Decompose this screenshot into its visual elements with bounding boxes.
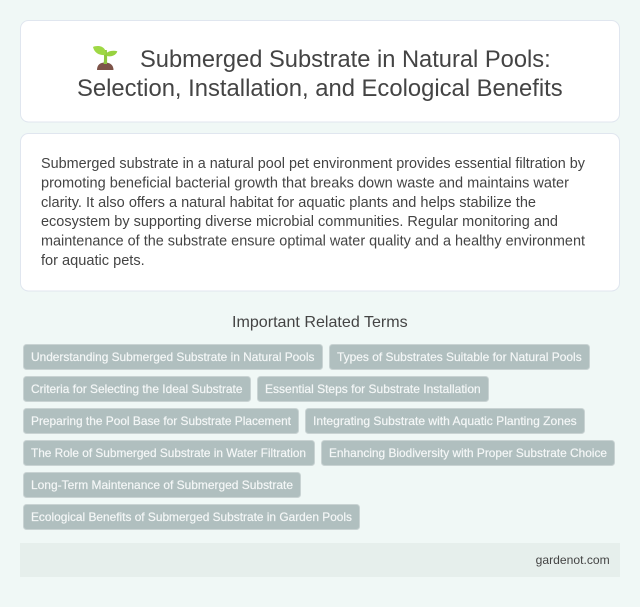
tag: [24, 504, 360, 530]
paragraph text: [41, 156, 586, 269]
paragraph text: maintenance of the substrate ensure optimal water quality and a healthy environment: [41, 234, 585, 250]
tag: Ecological Benefits of Submerged Substrate in Garden Pools: [31, 510, 352, 524]
tag: [258, 376, 488, 402]
tag: Understanding Submerged Substrate in Natural Pools: [31, 350, 314, 364]
paragraph text: clarity. It also offers a natural habitat for aquatic plants and helps stabilize the: [41, 195, 536, 211]
panel: description: [20, 134, 620, 291]
paragraph text: Submerged substrate in a natural pool pet environment provides essential filtration by: [41, 156, 586, 172]
tag: [330, 344, 590, 370]
tag: Preparing the Pool Base for Substrate Placement: [31, 414, 292, 428]
tag: Enhancing Biodiversity with Proper Substrate Choice: [329, 446, 607, 460]
title line 1: Submerged Substrate in Natural Pools:: [140, 46, 551, 73]
panel: header: [20, 20, 620, 122]
tag: [24, 440, 314, 466]
tag: The Role of Submerged Substrate in Water Filtration: [31, 446, 306, 460]
tag: [24, 472, 300, 498]
tag: Long-Term Maintenance of Submerged Substrate: [31, 478, 293, 492]
tag: [24, 408, 298, 434]
tag: Criteria for Selecting the Ideal Substrate: [31, 382, 243, 396]
heading: related terms: Important Related Terms: [232, 314, 408, 331]
title line 2: Selection, Installation, and Ecological Benefits: [77, 75, 563, 102]
tag: [306, 408, 584, 434]
tag: Types of Substrates Suitable for Natural Pools: [337, 350, 582, 364]
tag: [24, 376, 250, 402]
icon: seedling: [93, 46, 117, 70]
paragraph text: promoting beneficial bacterial growth that breaks down waste and maintains water: [41, 175, 569, 191]
paragraph text: ecosystem by supporting diverse microbial communities. Regular monitoring and: [41, 214, 558, 230]
tag: Integrating Substrate with Aquatic Planting Zones: [313, 414, 577, 428]
paragraph text: for aquatic pets.: [41, 253, 145, 269]
tag: [322, 440, 614, 466]
tag: Essential Steps for Substrate Installation: [265, 382, 481, 396]
tag list: [24, 344, 614, 530]
tag: [24, 344, 322, 370]
footer: gardenot.com: [536, 553, 610, 567]
footer: [20, 543, 620, 577]
